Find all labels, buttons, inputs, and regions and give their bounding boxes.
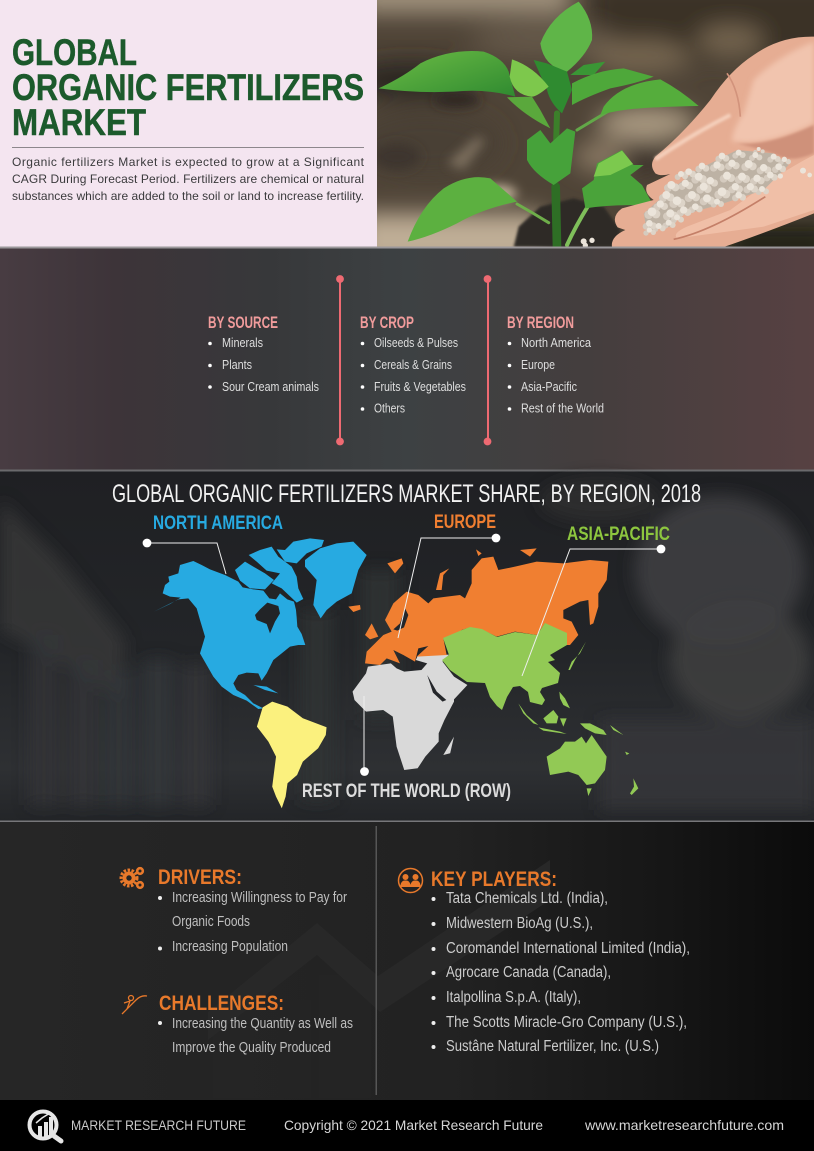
region: north america bbox=[154, 538, 367, 709]
region: rest of the world bbox=[353, 655, 467, 770]
column: by crop: BY CROP bbox=[360, 314, 414, 332]
column: by crop: Fruits & Vegetables bbox=[374, 380, 466, 394]
soil mound bbox=[514, 198, 620, 247]
footer website: www.marketresearchfuture.com bbox=[584, 1117, 784, 1133]
panel: header intro bbox=[0, 0, 377, 247]
stem bbox=[517, 110, 610, 247]
icon: gears bbox=[121, 868, 143, 888]
key players: KEY PLAYERS: bbox=[431, 868, 557, 891]
intro paragraph: Organic fertilizers Market is expected to grow at a Significant bbox=[12, 155, 365, 169]
column: by crop: Cereals & Grains bbox=[374, 358, 452, 372]
column: by source bbox=[208, 314, 319, 394]
map background texture bbox=[0, 478, 814, 810]
region: europe and russia bbox=[348, 548, 608, 665]
drivers: DRIVERS: bbox=[158, 866, 242, 889]
column: by region: Rest of the World bbox=[521, 402, 604, 416]
label: europe: EUROPE bbox=[434, 512, 496, 533]
label: asia-pacific bbox=[522, 524, 670, 676]
challenges: Increasing the Quantity as Well as bbox=[172, 1016, 353, 1032]
footer brand: MARKET RESEARCH FUTURE bbox=[71, 1117, 246, 1133]
challenges: Improve the Quality Produced bbox=[172, 1040, 331, 1056]
fertilizer pellets bbox=[581, 147, 812, 248]
label: north america: NORTH AMERICA bbox=[153, 513, 283, 534]
footer bbox=[0, 1100, 814, 1151]
icon: person pushing uphill bbox=[122, 996, 147, 1014]
panel: drivers, challenges and key players bbox=[0, 820, 814, 1100]
logo: magnifier with bars bbox=[30, 1112, 61, 1141]
column: by source: BY SOURCE bbox=[208, 314, 278, 332]
column: by crop bbox=[360, 314, 466, 416]
drivers: Increasing Population bbox=[172, 939, 288, 955]
challenges bbox=[122, 992, 353, 1056]
region: asia-pacific bbox=[442, 623, 638, 796]
panel: market share map bbox=[0, 470, 814, 821]
column: by region: BY REGION bbox=[507, 314, 574, 332]
column: by source: Sour Cream animals bbox=[222, 380, 319, 394]
column: by crop: Others bbox=[374, 402, 405, 416]
column: by source: Plants bbox=[222, 358, 252, 372]
drivers: Increasing Willingness to Pay for bbox=[172, 890, 347, 906]
world map bbox=[154, 538, 638, 808]
label: rest of the world bbox=[302, 696, 511, 802]
timeline pillar 1 bbox=[336, 275, 344, 445]
panel: segmentation bbox=[0, 246, 814, 470]
footer copyright: Copyright © 2021 Market Research Future bbox=[284, 1117, 543, 1133]
label: asia-pacific: ASIA-PACIFIC bbox=[567, 524, 670, 545]
intro paragraph bbox=[12, 155, 365, 203]
region: south america bbox=[257, 702, 327, 808]
label: rest of the world: REST OF THE WORLD (ROW) bbox=[302, 781, 511, 802]
drivers bbox=[121, 866, 347, 955]
background arrow watermark bbox=[208, 860, 550, 1098]
title: ORGANIC FERTILIZERS bbox=[12, 67, 364, 108]
label: europe bbox=[398, 512, 500, 638]
key players: Midwestern BioAg (U.S.), bbox=[446, 915, 593, 932]
key players: Agrocare Canada (Canada), bbox=[446, 964, 611, 981]
drivers: Organic Foods bbox=[172, 914, 250, 930]
column: by region: Europe bbox=[521, 358, 555, 372]
intro paragraph: CAGR During Forecast Period. Fertilizers are chemical or natural bbox=[12, 172, 364, 186]
icon: people in target bbox=[398, 868, 422, 892]
column: by source: Minerals bbox=[222, 336, 263, 350]
intro paragraph: substances which are added to the soil or land to increase fertility. bbox=[12, 189, 364, 203]
column: by crop: Oilseeds & Pulses bbox=[374, 336, 458, 350]
key players: Tata Chemicals Ltd. (India), bbox=[446, 890, 608, 907]
title: GLOBAL bbox=[12, 32, 137, 73]
label: north america bbox=[143, 513, 283, 574]
key players: The Scotts Miracle-Gro Company (U.S.), bbox=[446, 1014, 687, 1031]
key players: Sustâne Natural Fertilizer, Inc. (U.S.) bbox=[446, 1038, 659, 1055]
timeline pillar 2 bbox=[484, 275, 491, 445]
title: MARKET bbox=[12, 102, 146, 143]
photo: seedling and hand holding fertilizer bbox=[347, 0, 814, 270]
hand bbox=[612, 37, 814, 247]
leaves bbox=[379, 2, 699, 242]
key players bbox=[398, 868, 690, 1055]
column: by region: North America bbox=[521, 336, 591, 350]
key players: Coromandel International Limited (India), bbox=[446, 940, 690, 957]
key players: Italpollina S.p.A. (Italy), bbox=[446, 989, 581, 1006]
title bbox=[12, 32, 364, 143]
challenges: CHALLENGES: bbox=[159, 992, 284, 1015]
column: by region bbox=[507, 314, 604, 416]
column: by region: Asia-Pacific bbox=[521, 380, 577, 394]
